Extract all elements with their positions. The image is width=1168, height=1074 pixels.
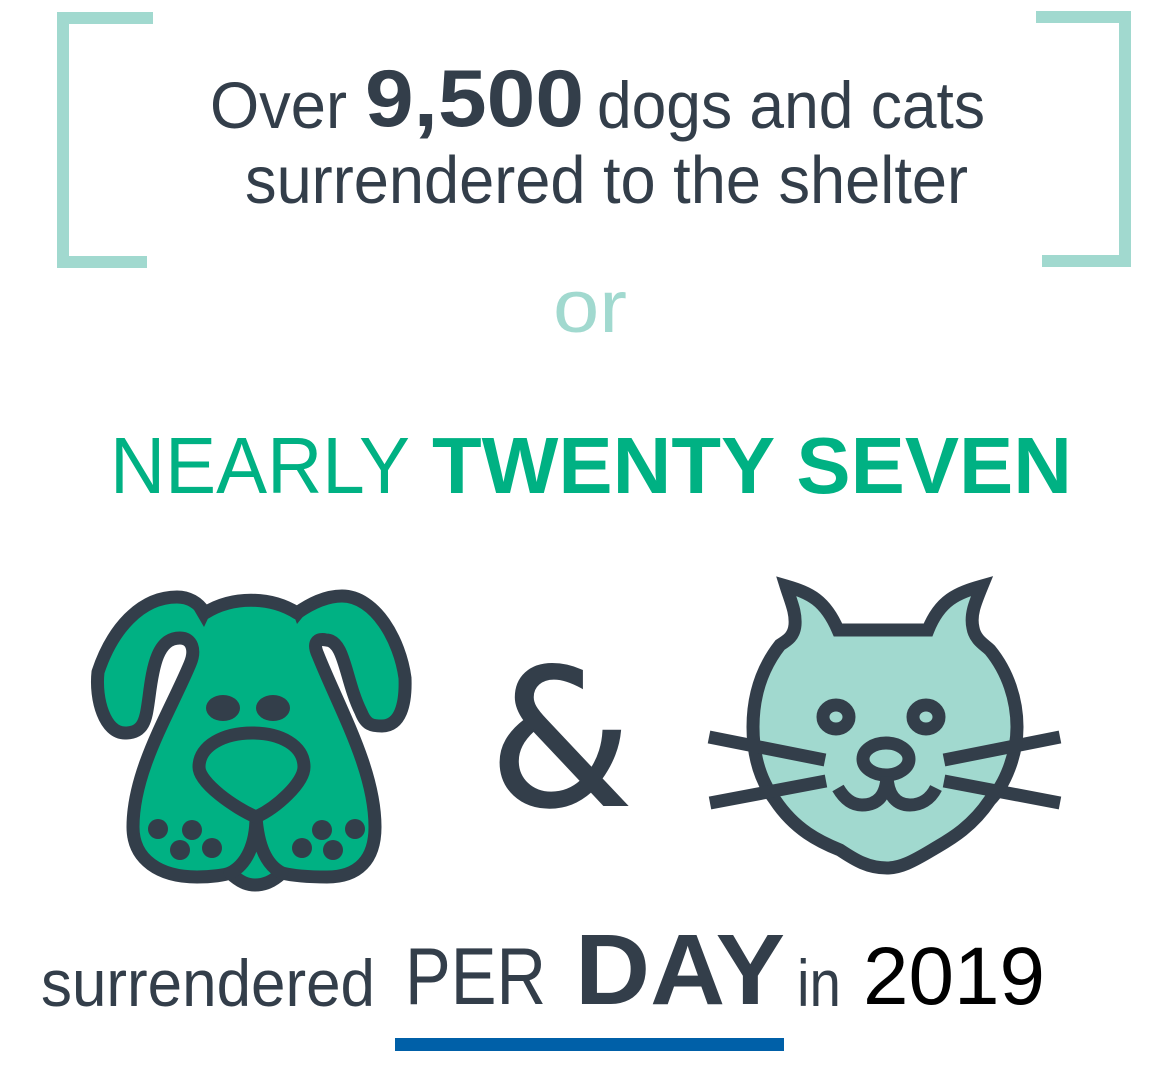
footer line: surrendered per day in 2019: 2019 xyxy=(863,931,1045,1022)
heading: nearly twenty seven: TWENTY SEVEN xyxy=(432,421,1072,510)
icon detail: muzzle and chin lines xyxy=(230,817,282,873)
headline: over 9,500 surrendered xyxy=(210,54,985,218)
headline: over 9,500 surrendered: dogs and cats xyxy=(597,68,985,142)
icon: dog face xyxy=(97,596,405,885)
footer line: surrendered per day in 2019: surrendered xyxy=(41,946,375,1020)
headline: over 9,500 surrendered: 9,500 xyxy=(365,54,584,144)
icon: cat face xyxy=(709,586,1060,868)
icon detail: ear fold wedges xyxy=(190,603,314,627)
icon detail: mouth xyxy=(838,777,936,805)
ampersand: & xyxy=(489,629,632,850)
heading: nearly twenty seven: NEARLY xyxy=(110,421,410,510)
footer line: surrendered per day in 2019: DAY xyxy=(575,914,785,1026)
right bracket xyxy=(1036,17,1125,261)
icon detail: whiskers xyxy=(709,737,1060,803)
icon detail: nose xyxy=(863,743,909,775)
left bracket xyxy=(63,18,153,262)
icon detail: eyes and whisker dots xyxy=(148,695,365,860)
footer line: surrendered per day in 2019: PER xyxy=(405,932,546,1022)
icon detail: eyes xyxy=(823,705,849,729)
headline: over 9,500 surrendered: Over xyxy=(210,68,347,142)
heading: nearly twenty seven xyxy=(110,421,1072,510)
footer line: surrendered per day in 2019 xyxy=(41,914,1045,1026)
connector word: or: or xyxy=(553,265,627,348)
icon detail: nose xyxy=(199,733,304,817)
headline: over 9,500 surrendered: surrendered to the shelter xyxy=(245,143,968,218)
footer line: surrendered per day in 2019: in xyxy=(797,946,841,1020)
underline accent xyxy=(395,1038,784,1051)
